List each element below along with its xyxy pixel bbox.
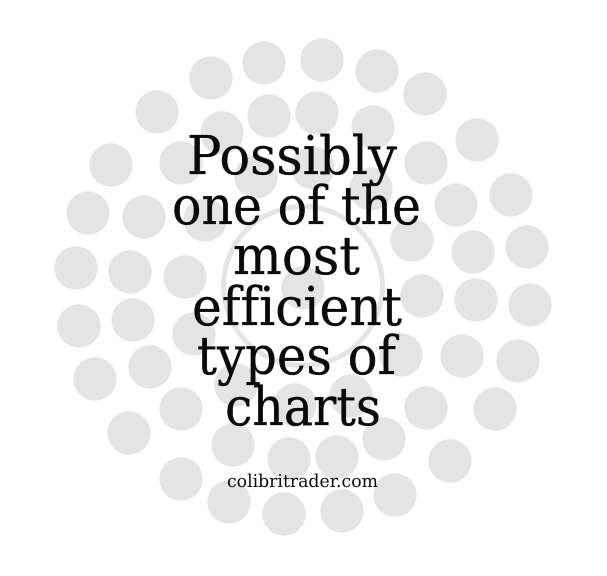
website credit: colibritrader.com: [227, 471, 378, 492]
title: efficient: [192, 277, 402, 338]
title: [172, 126, 421, 438]
central ring: [224, 206, 382, 366]
title: charts: [225, 377, 381, 438]
dot pattern background: [54, 38, 552, 536]
title: one of the: [172, 176, 421, 237]
title: Possibly: [187, 126, 397, 187]
title: types of: [197, 326, 399, 387]
title: most: [233, 226, 360, 287]
